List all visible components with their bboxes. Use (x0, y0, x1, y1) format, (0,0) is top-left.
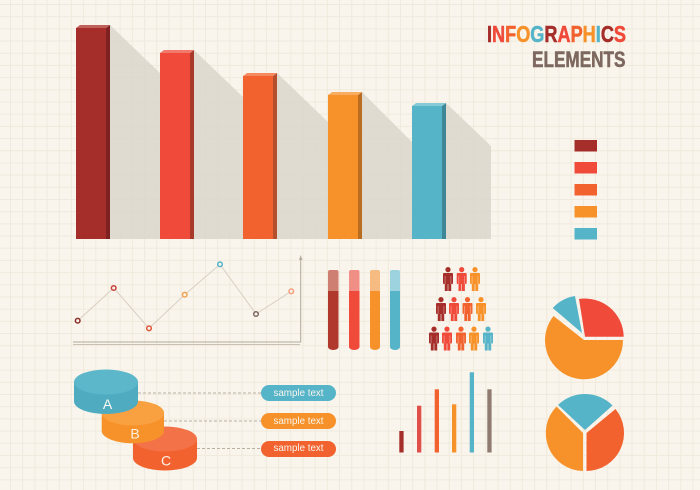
pill label 3: sample text (273, 443, 324, 454)
3D bar chart (76, 25, 491, 239)
pill label 1 (261, 385, 336, 401)
heading: infographics: INFOGRAPHICS (487, 21, 626, 47)
row 3 (429, 326, 493, 350)
row 2 (436, 297, 486, 321)
disc B (102, 400, 164, 443)
stacked discs with labels (74, 370, 336, 470)
bar 4 orange (328, 92, 362, 239)
data line (78, 264, 291, 328)
pill label 2 (261, 413, 336, 429)
data points (75, 262, 294, 331)
bar shadows (110, 25, 491, 239)
people pyramid (429, 267, 493, 350)
disc C (133, 426, 197, 470)
heading: elements: ELEMENTS (532, 47, 626, 72)
tube 1 (328, 270, 338, 350)
axes (73, 255, 302, 344)
bar 1 dark red (76, 25, 110, 239)
tube 2 (349, 270, 360, 350)
pie chart 1 (545, 296, 624, 379)
tube 4 (390, 270, 400, 350)
row 1 (443, 267, 480, 291)
pie chart 2 (546, 394, 624, 471)
pill label 2: sample text (273, 416, 324, 427)
pill label 3 (261, 441, 336, 457)
line chart (73, 255, 302, 344)
disc C: C (161, 452, 171, 468)
colour legend (574, 140, 597, 240)
disc B: B (130, 426, 140, 442)
connector lines (138, 393, 261, 448)
test tube bars (328, 270, 400, 350)
bar 5 blue (412, 103, 446, 239)
disc A (74, 370, 138, 414)
tube 3 (370, 270, 380, 350)
bar 2 red (160, 50, 194, 239)
thin bar chart (399, 372, 492, 452)
bar 3 orange red (243, 73, 277, 239)
pill label 1: sample text (273, 388, 324, 399)
disc A: A (103, 396, 113, 412)
title (487, 21, 626, 72)
